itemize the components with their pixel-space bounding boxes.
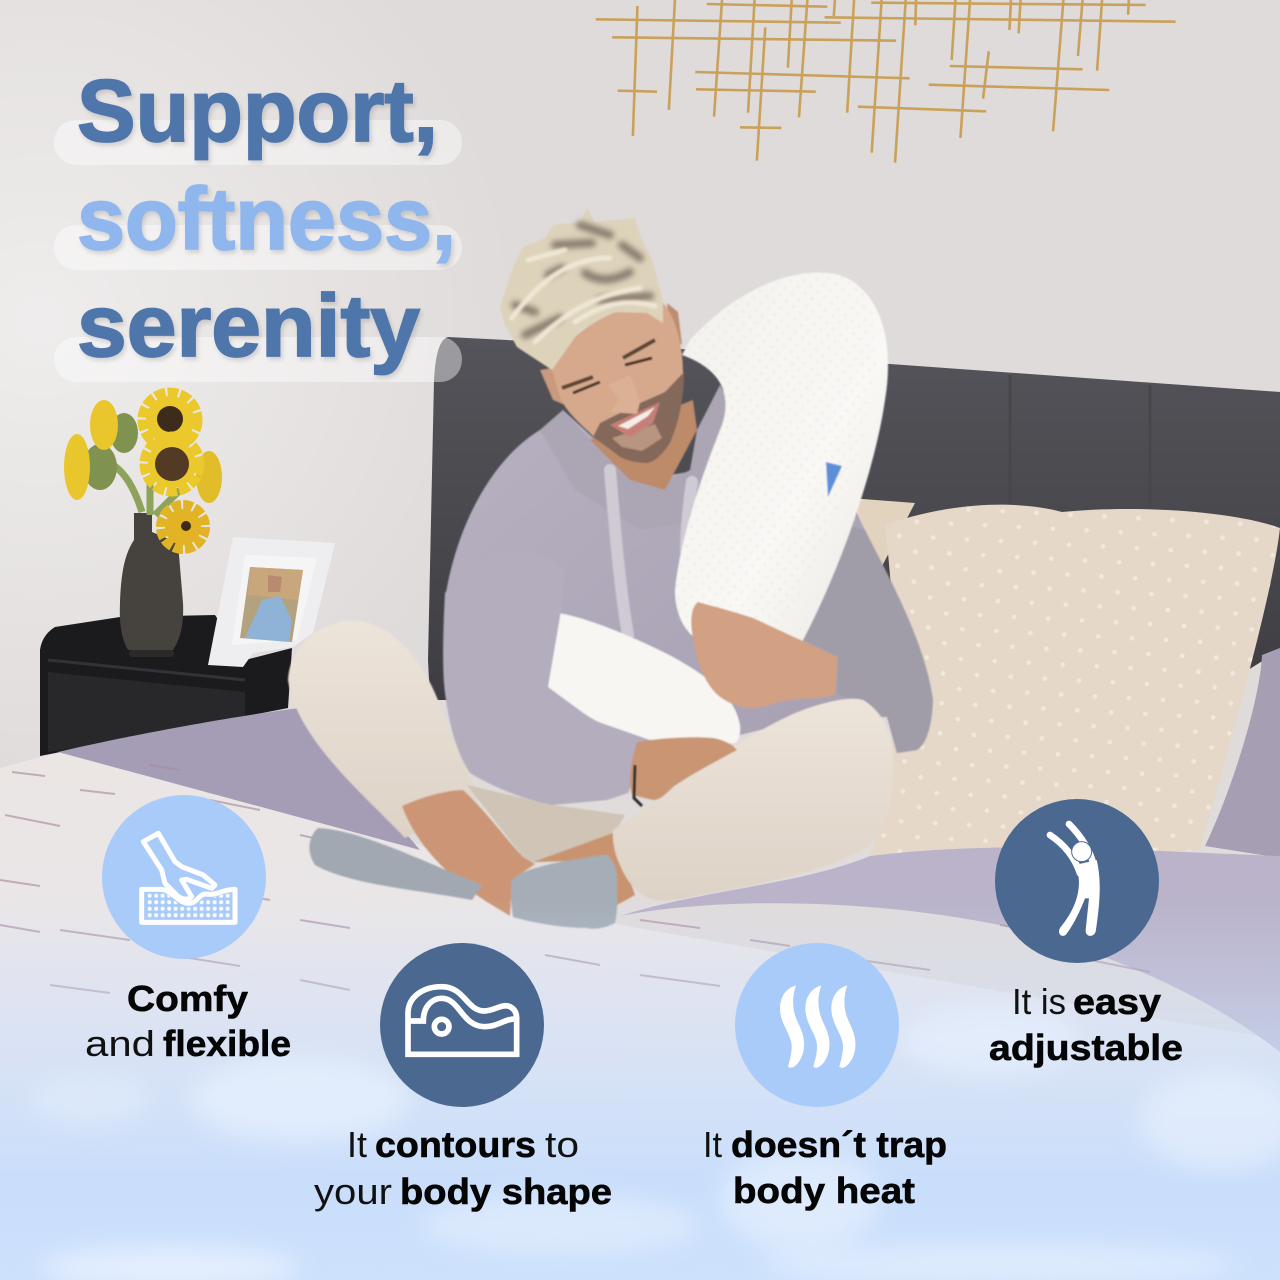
upper pillow section (675, 273, 888, 642)
gold wall art (596, 0, 1176, 163)
label: it is easy adjustable: adjustable (989, 1027, 1183, 1068)
title line: Support: Support, (77, 61, 438, 160)
seat of trousers (467, 785, 625, 862)
clouds (30, 1004, 1280, 1280)
feature: contours to body shape (314, 943, 612, 1212)
hoodie right sleeve (803, 520, 933, 753)
chin skin (612, 424, 662, 451)
label: it contours to your body shape: your (314, 1171, 392, 1212)
side flower upper (90, 400, 138, 453)
vase with sunflowers (64, 394, 222, 657)
vase (120, 513, 183, 650)
right sock (511, 855, 617, 929)
title (54, 61, 462, 382)
label: comfy and flexible: flexible (163, 1023, 291, 1064)
label: it contours to your body shape: It (347, 1124, 367, 1165)
pillow tag (826, 462, 842, 497)
bare ankle right (533, 833, 635, 905)
label: it doesn't trap body heat (703, 1124, 947, 1211)
wall background (0, 0, 1280, 800)
hoodie cords (610, 470, 692, 635)
sunflower centre (146, 438, 198, 490)
beige pillows (850, 498, 1280, 857)
right trouser leg (613, 699, 893, 901)
label: it contours to your body shape: body shape (400, 1171, 612, 1212)
hood collar (540, 385, 735, 530)
label: it is easy adjustable: It is (1012, 981, 1066, 1022)
picture frame (208, 537, 335, 667)
hand gripping pillow (691, 602, 838, 708)
wrist band (634, 765, 642, 806)
teeth (618, 407, 655, 429)
feature: comfy and flexible (85, 795, 291, 1064)
blue sky fade (0, 900, 1280, 1280)
sunflower bottom (162, 506, 204, 548)
bare shin left (402, 790, 535, 916)
nightstand (40, 615, 292, 756)
title backing pill 3 (54, 337, 462, 382)
label: comfy and flexible: and (85, 1023, 155, 1064)
label: it doesn't trap body heat: doesn´t trap (731, 1124, 947, 1165)
eyes and brows (562, 340, 655, 388)
label: comfy and flexible (85, 978, 291, 1064)
label: it is easy adjustable: easy (1073, 981, 1161, 1022)
title backing pill 1 (54, 120, 462, 165)
person sitting cross-legged hugging pillow (288, 208, 933, 929)
label: it doesn't trap body heat: body heat (733, 1170, 915, 1211)
feature: does not trap heat (703, 943, 947, 1211)
label: it doesn't trap body heat: It (703, 1124, 722, 1165)
duvet stitching (0, 765, 1150, 993)
icon: hand pressing foam (102, 795, 266, 959)
beard (593, 372, 684, 463)
label: it contours to your body shape: contours (375, 1124, 536, 1165)
side flower left (64, 434, 117, 500)
nose (608, 375, 640, 414)
hair (500, 208, 663, 370)
icon: heat waves (735, 943, 899, 1107)
icon: stretching person (995, 799, 1159, 963)
lower pillow section (547, 613, 740, 744)
closed eyelids (573, 358, 652, 393)
lilac pillow (1205, 648, 1280, 858)
label: it contours to your body shape (314, 1124, 612, 1212)
left sock (309, 828, 482, 900)
feature: easy adjustable (989, 799, 1183, 1068)
stems (108, 462, 180, 515)
mouth (610, 402, 660, 437)
upper pillow weave (675, 273, 878, 640)
headboard (428, 337, 1280, 700)
title line: softness: softness, (77, 169, 456, 268)
sunflower top (144, 394, 196, 446)
hair dark streaks (515, 225, 650, 335)
side flower right (196, 451, 222, 503)
left sleeve (443, 550, 650, 805)
left ear (540, 368, 565, 405)
title line: serenity: serenity (77, 276, 420, 375)
lilac sheets (58, 708, 1280, 1052)
hand on lower pillow (630, 737, 737, 800)
left knee and thigh (288, 621, 480, 838)
right ear (667, 303, 682, 345)
face (552, 303, 683, 463)
neck (590, 400, 697, 490)
label: comfy and flexible: Comfy (127, 978, 248, 1019)
label: it contours to your body shape: to (545, 1124, 579, 1165)
hoodie torso (445, 385, 920, 805)
title backing pill 2 (54, 225, 462, 270)
bed duvet (0, 752, 1280, 1280)
vase foot (129, 650, 174, 657)
icon: contour pillow (380, 943, 544, 1107)
label: it is easy adjustable (989, 981, 1183, 1068)
hair highlights (512, 250, 655, 342)
